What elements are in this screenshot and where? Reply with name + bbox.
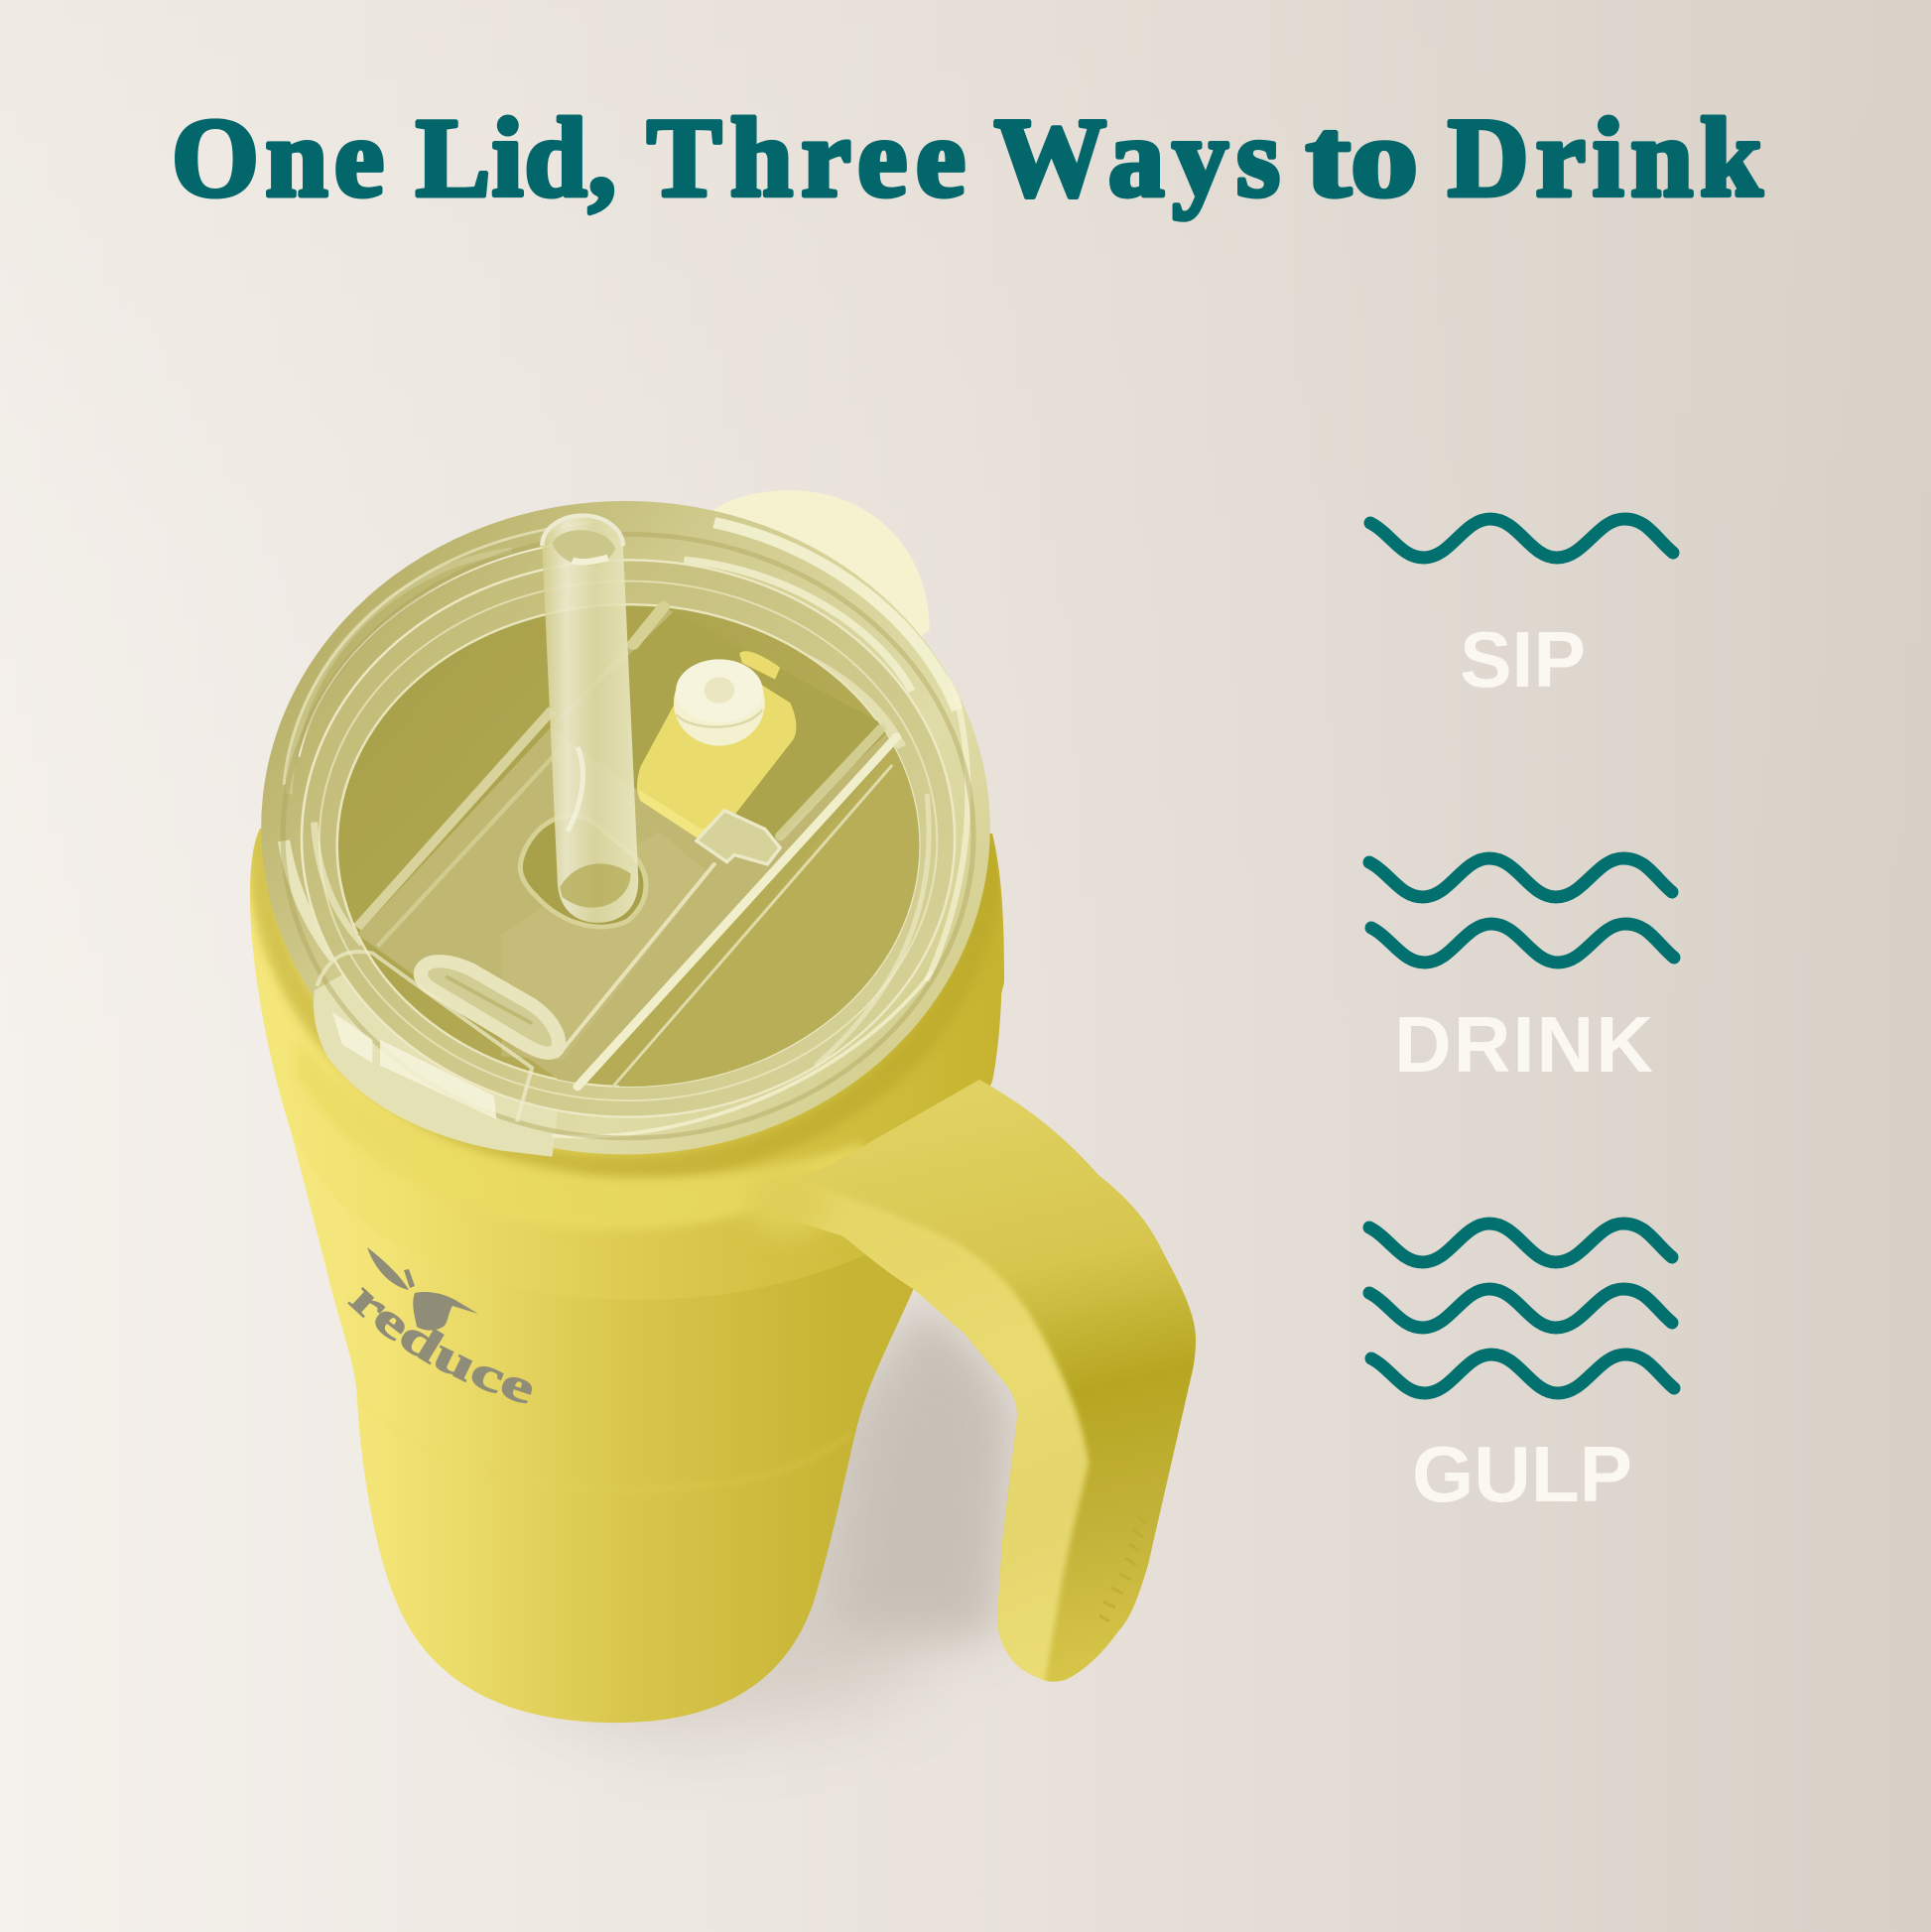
title: [172, 96, 1762, 220]
handle: [754, 1080, 1196, 1682]
lid straw tab: [705, 490, 930, 663]
gulp label: GULP: [1412, 1430, 1632, 1518]
straw: [542, 516, 638, 923]
tumbler: [250, 490, 1196, 1723]
title: Lid,: [416, 96, 616, 220]
logo leaf: [367, 1247, 415, 1290]
drink label: DRINK: [1394, 1000, 1653, 1089]
gulp icon: three waves: [1369, 1224, 1674, 1393]
right panel tone: [619, 746, 919, 1087]
lid inner ring: [302, 560, 955, 1117]
lid: [261, 490, 990, 1157]
logo bird: [413, 1292, 478, 1331]
center channel: [357, 607, 896, 1094]
sip icon: one wave: [1370, 519, 1673, 558]
stopper plug: [674, 660, 765, 746]
dark olive channel upper: [628, 612, 886, 839]
lid outer rim: [261, 501, 990, 1154]
handle root blend: [747, 1169, 831, 1236]
drop shadow behind tumbler: [516, 1300, 1012, 1737]
handle inner face: [815, 1196, 1092, 1681]
title: Three: [647, 96, 966, 220]
title: One: [172, 96, 384, 220]
straw hole: [520, 816, 646, 927]
lower body highlight band: [357, 1398, 851, 1489]
lid well: [337, 604, 919, 1087]
inner ring concentric glare: [315, 581, 937, 1100]
left lid edge: [357, 709, 553, 928]
lower channel lens: [502, 832, 709, 1061]
logo wordmark: reduce: [347, 1287, 532, 1403]
collar shadow under lid: [250, 829, 997, 1179]
title: to: [1306, 96, 1418, 220]
sip label: SIP: [1460, 615, 1586, 704]
hinge: [697, 811, 780, 864]
front tab highlight: [332, 1012, 496, 1119]
reduce logo: [347, 1247, 532, 1403]
lid front tab: [314, 954, 563, 1157]
yellow stopper flap: [637, 651, 796, 840]
tumbler collar: [250, 829, 1002, 1300]
vent gasket: [421, 962, 559, 1053]
shoulder light band: [298, 1042, 863, 1230]
title: Drink: [1448, 96, 1762, 220]
front tab ridge: [317, 952, 532, 1121]
divider: [558, 607, 896, 1087]
drink icon: two waves: [1369, 858, 1674, 963]
tumbler body: [250, 829, 1004, 1723]
rim glare strokes: [283, 523, 973, 1138]
handle embossed text marks: [1099, 1516, 1146, 1621]
title: Ways: [994, 96, 1280, 220]
